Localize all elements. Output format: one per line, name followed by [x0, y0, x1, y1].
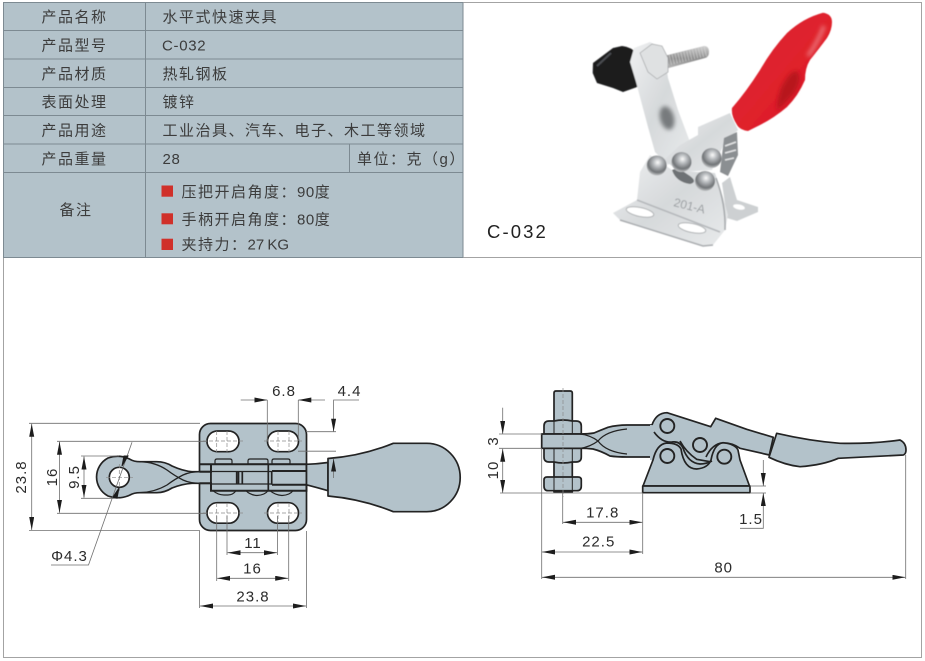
pivot washers [720, 132, 738, 176]
row: product name: 水平式快速夹具 [162, 9, 278, 26]
dim 17.8: 17.8 [586, 504, 619, 522]
row: product name: 产品名称 [42, 9, 108, 26]
row: weight: 产品重量 [42, 151, 108, 168]
drawing: side view of clamp [542, 388, 906, 497]
centre band [211, 464, 306, 491]
dim 1.5: 1.5 [739, 511, 763, 528]
slot centre marks [203, 431, 302, 523]
lever plate [664, 113, 738, 172]
dim 11 [227, 516, 278, 555]
specification table [3, 2, 466, 258]
dim 6.8 [241, 383, 325, 441]
clamp arm and eye [97, 456, 211, 498]
row: applications: 工业治具、汽车、电子、木工等领域 [162, 122, 427, 140]
upright arm [630, 42, 690, 165]
row: model: C-032 [162, 38, 206, 54]
dimensions: side view [485, 408, 906, 579]
dim diameter 4.3 [51, 442, 132, 565]
dim 11: 11 [244, 535, 262, 552]
row: material: 热轧钢板 [162, 65, 229, 83]
red grip [732, 13, 832, 131]
dim 80: 80 [714, 560, 733, 577]
lower nut [544, 448, 581, 463]
dim 4.4 [298, 383, 361, 478]
dim 9.5 vertical: 9.5 [66, 465, 83, 489]
dim 16 [217, 516, 289, 581]
lever fill [652, 413, 773, 459]
base plate [200, 424, 306, 530]
dim 23.8 vertical: 23.8 [13, 460, 30, 494]
pivots [660, 419, 731, 464]
side grip [769, 433, 906, 467]
model label: C-032 [487, 221, 548, 242]
row: remarks: 夹持力：27 KG [182, 236, 289, 254]
row: surface treatment: 表面处理 [42, 94, 108, 111]
arm fill [542, 425, 655, 457]
stamped mark: 201-A [672, 195, 707, 217]
pedestal [643, 443, 750, 486]
dimensions: top view [13, 383, 361, 608]
link inner curves [654, 432, 712, 464]
dim 1.5 [739, 460, 766, 528]
drawing: top view of clamp [97, 424, 460, 530]
base foot [643, 486, 750, 493]
mounting slots [625, 205, 655, 219]
dim 17.8 [563, 493, 643, 554]
row: product name [42, 9, 278, 26]
row: material [42, 65, 229, 83]
stud centre line [562, 388, 564, 497]
threaded bolt [656, 46, 709, 71]
row: remarks: 手柄开启角度：80度 [182, 212, 331, 228]
row: material: 产品材质 [42, 66, 108, 83]
row: model [42, 38, 206, 54]
rear base plate [722, 177, 758, 221]
dim 3 and 10 [485, 408, 643, 493]
row: weight: 单位：克（g） [357, 151, 466, 168]
product photo: toggle clamp [593, 13, 832, 246]
row: surface treatment [42, 94, 196, 111]
rubber tip [593, 46, 640, 92]
dim 23.8 [200, 531, 306, 608]
hex nut [640, 44, 668, 79]
arm outline [542, 425, 652, 457]
dim 16: 16 [243, 560, 262, 578]
rivet bumps [213, 459, 293, 496]
dim 9.5 vertical [66, 456, 119, 498]
row: applications: 产品用途 [42, 122, 108, 140]
row: model: 产品型号 [42, 38, 108, 54]
threaded stud [554, 391, 572, 492]
dim 4.4: 4.4 [338, 383, 361, 400]
eye centre marks [106, 464, 133, 491]
dim 16 vertical: 16 [44, 468, 61, 486]
eye hole [109, 467, 129, 487]
row: remarks: 压把开启角度：90度 [182, 184, 331, 201]
dim 3 and 10: 3 [485, 436, 502, 446]
neck and grip [306, 462, 328, 491]
arm shading [657, 105, 677, 131]
mechanism fill [650, 425, 738, 470]
dim 23.8: 23.8 [236, 588, 270, 606]
upper nut [544, 420, 581, 434]
slots [207, 431, 298, 523]
dim 22.5 [542, 448, 642, 579]
nut facets [554, 421, 572, 491]
row: weight: 28 [162, 151, 181, 168]
row: applications [42, 122, 427, 140]
dim 22.5: 22.5 [582, 534, 615, 551]
lever outline [652, 413, 773, 457]
grip shading [777, 26, 824, 110]
row: remarks: 备注 [60, 202, 93, 219]
bottom nut [544, 477, 581, 491]
row: weight [42, 151, 466, 168]
row: remarks [60, 184, 331, 254]
dim diameter 4.3: Φ4.3 [51, 548, 88, 565]
dim 3 and 10: 10 [485, 461, 502, 479]
row: surface treatment: 镀锌 [162, 94, 196, 111]
front base plate [613, 155, 728, 246]
rivets [647, 148, 722, 191]
dim 6.8: 6.8 [272, 383, 296, 400]
